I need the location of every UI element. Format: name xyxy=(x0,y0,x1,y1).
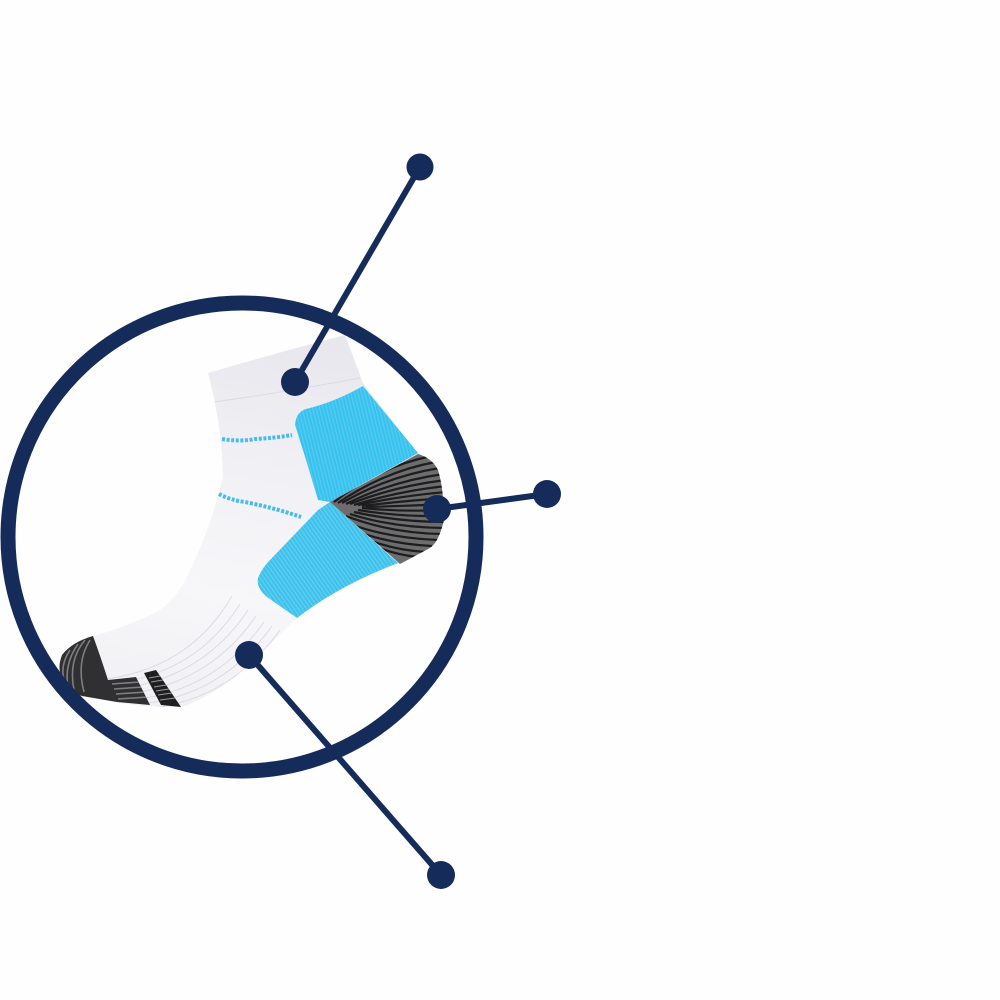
blue stitching: upper xyxy=(222,435,292,440)
ring xyxy=(8,303,476,771)
black toe xyxy=(60,636,150,705)
pointer: heel xyxy=(423,480,561,523)
black toe stripe xyxy=(144,670,181,707)
blue panel: upper xyxy=(295,386,418,502)
infographic: sock with callout pointers xyxy=(0,154,561,889)
blue panel: lower xyxy=(258,502,398,618)
pointer: top cuff xyxy=(281,154,434,396)
sock xyxy=(59,335,446,714)
pointer: arch xyxy=(235,641,455,889)
blue stitching: lower xyxy=(219,494,301,517)
sock body xyxy=(59,335,444,707)
black heel xyxy=(330,454,446,564)
